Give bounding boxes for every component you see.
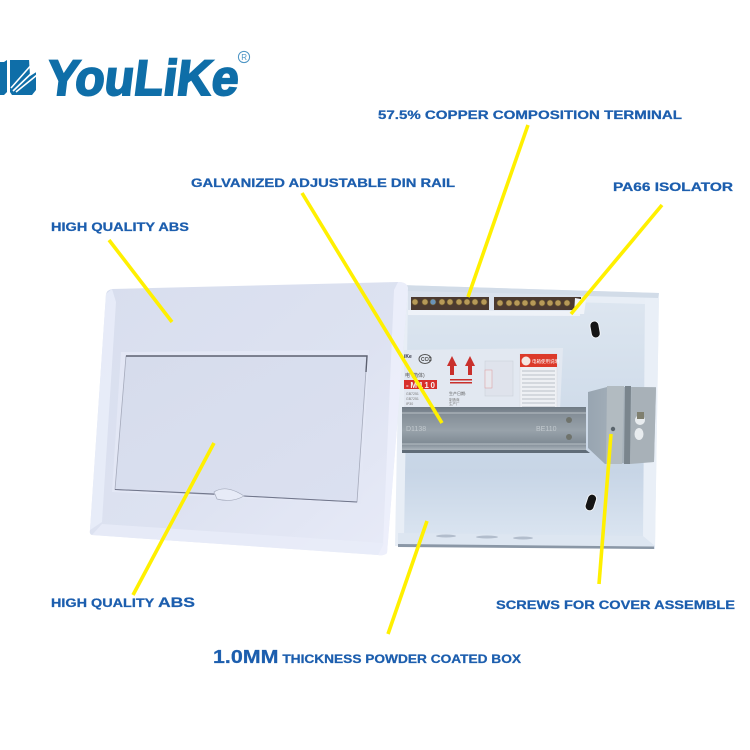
label: screws: SCREWS FOR COVER ASSEMBLE (496, 600, 735, 612)
pointer: high quality abs bottom (133, 443, 214, 595)
label: powder coated box: 1.0MM THICKNESS POWDER COATED BOX (213, 647, 521, 667)
pointer: din rail (302, 193, 442, 423)
product: white cover (90, 282, 408, 555)
logo wordmark: YouLiKe (44, 50, 243, 106)
diagram panel (485, 361, 513, 396)
pointer: isolator (571, 205, 662, 314)
box outer shell (395, 285, 659, 548)
hinged door (115, 356, 367, 502)
box right wall (643, 293, 659, 546)
warning label sheet: IP30 (406, 402, 413, 406)
logo: YouLiKe (0, 50, 250, 106)
cover recess (112, 350, 369, 504)
terminal bar (408, 291, 586, 316)
mounting bracket (588, 386, 656, 464)
red warning card: 电箱使用说明 (532, 358, 559, 365)
registered mark: R (241, 53, 247, 62)
label: high quality abs bottom: HIGH QUALITY ABS (51, 594, 195, 610)
warning label sheet (404, 348, 563, 424)
DIN rail: D1138 (406, 426, 426, 433)
cover panel (90, 282, 408, 555)
box interior (404, 298, 645, 540)
label: copper terminal: 57.5% COPPER COMPOSITION TERMINAL (378, 110, 682, 122)
pointer: powder coated box (388, 521, 427, 634)
registered mark (238, 51, 250, 63)
pointer: copper terminal (468, 125, 528, 297)
icon: logo mark (0, 59, 38, 95)
certification mark (419, 354, 432, 364)
pointer: screws (599, 434, 611, 584)
DIN rail: BE110 (536, 426, 557, 433)
box bottom lip (398, 533, 655, 549)
red up arrows (447, 356, 475, 384)
product: metal box (395, 285, 659, 549)
label: din rail: GALVANIZED ADJUSTABLE DIN RAIL (191, 178, 455, 190)
red model tag: -M110 (406, 381, 436, 390)
label: isolator: PA66 ISOLATOR (613, 182, 734, 194)
certification mark: CCC (421, 357, 432, 363)
warning label sheet: 生产厂 (449, 401, 460, 406)
warning label sheet: 生产日期: (449, 390, 466, 396)
DIN rail (402, 407, 590, 453)
slot holes (589, 320, 601, 339)
warning label sheet: GB7251 (406, 392, 419, 396)
warning label sheet: iKe (404, 354, 412, 360)
red warning card (520, 354, 559, 424)
warning label sheet: GB7251 (406, 397, 419, 401)
warning label sheet: 电 (箱体) (405, 372, 425, 379)
label: high quality abs top: HIGH QUALITY ABS (51, 222, 189, 234)
door latch (214, 489, 244, 500)
pointer: high quality abs top (109, 240, 172, 322)
warning label sheet: 制造商 (449, 397, 460, 402)
